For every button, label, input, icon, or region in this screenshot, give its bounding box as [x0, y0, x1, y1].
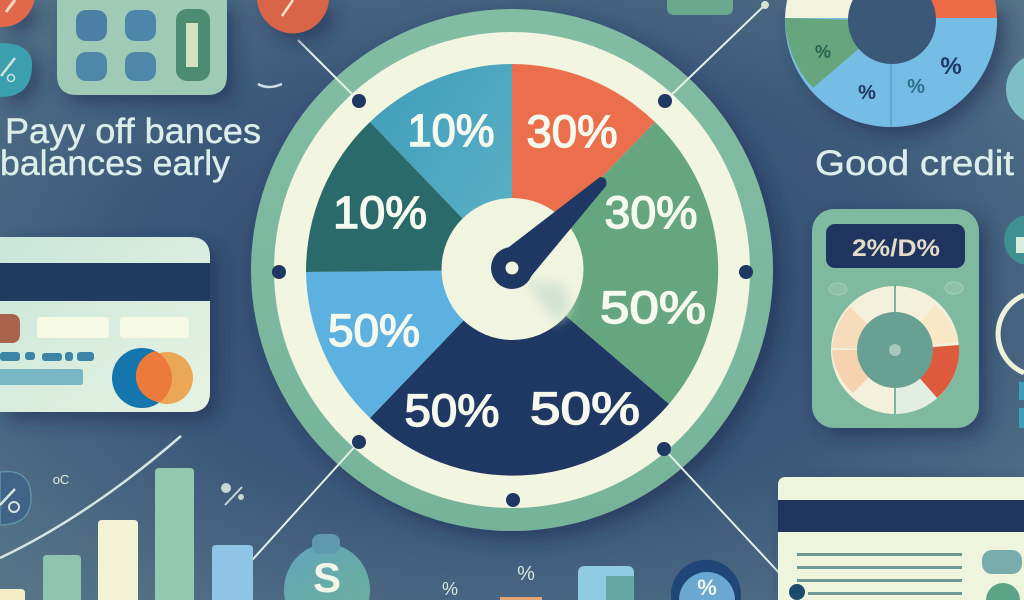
calculator dial: [831, 285, 959, 414]
card logo: [112, 348, 193, 408]
small percent icons left: oC: [53, 472, 69, 487]
hub shadow wedge: [525, 280, 570, 322]
label: 50% green: 50%: [600, 282, 706, 333]
label: 10% top: 10%: [408, 105, 494, 156]
center hub disc: [442, 198, 584, 340]
credit card: [0, 237, 210, 412]
label: 50% left: 50%: [328, 305, 420, 356]
red badge top-left: [0, 0, 34, 27]
cylinder icon: [578, 566, 634, 600]
donut percent marks: %: [940, 53, 962, 80]
money bag: S: [313, 554, 341, 600]
wedge: left dark teal: [306, 122, 512, 272]
wedge: top-left teal: [370, 64, 512, 270]
calculator right: 2%/D%: [852, 235, 940, 262]
donut chart top-right: [785, 0, 997, 127]
gauge needle: [491, 177, 606, 289]
small percent icons left: [0, 472, 244, 525]
orange chip: [500, 597, 542, 600]
wedge: right green: [512, 122, 718, 404]
connector end cap: [761, 1, 769, 9]
wedge: left light blue: [306, 270, 512, 418]
small percent symbols: %: [442, 579, 458, 599]
blue percent badge: %: [697, 575, 717, 600]
calculator right: [812, 209, 979, 428]
right edge icons: [998, 216, 1024, 428]
calculator top-left: [57, 0, 227, 95]
label: 30% green: 30%: [604, 187, 698, 238]
donut percent marks: %: [907, 76, 925, 98]
stray mark: [258, 84, 282, 87]
heading: pay off balances: Payy off bances: [5, 112, 261, 151]
tick dots: [272, 94, 753, 507]
green tab top: [667, 0, 733, 15]
wedge: bottom navy: [370, 270, 669, 476]
document bottom-right: [778, 477, 1024, 600]
small percent symbols: [442, 563, 535, 599]
donut percent marks: %: [858, 82, 876, 104]
side badge top right: [1006, 58, 1024, 120]
red percent badge top: [257, 0, 329, 33]
trend line: [0, 436, 181, 558]
bottom-left bar chart: [0, 436, 253, 600]
wedge: top orange: [512, 64, 655, 270]
blue percent badge: [671, 560, 741, 600]
heading: good credit: Good credit: [815, 144, 1014, 183]
label: 30% orange: 30%: [526, 106, 618, 157]
small percent symbols: %: [517, 563, 535, 585]
label: 50% navy left: 50%: [404, 385, 500, 436]
money bag: [284, 534, 370, 600]
donut percent marks: [815, 42, 962, 104]
connector lines: [225, 5, 795, 590]
document pin: [789, 584, 805, 600]
heading: pay off balances: [0, 112, 261, 183]
label: 50% navy right: 50%: [530, 383, 640, 434]
label: 10% left: 10%: [333, 187, 427, 238]
heading: pay off balances: balances early: [0, 144, 230, 183]
teal percent badge: [0, 43, 32, 97]
donut percent marks: %: [815, 42, 831, 62]
gauge wheel: [251, 9, 773, 531]
